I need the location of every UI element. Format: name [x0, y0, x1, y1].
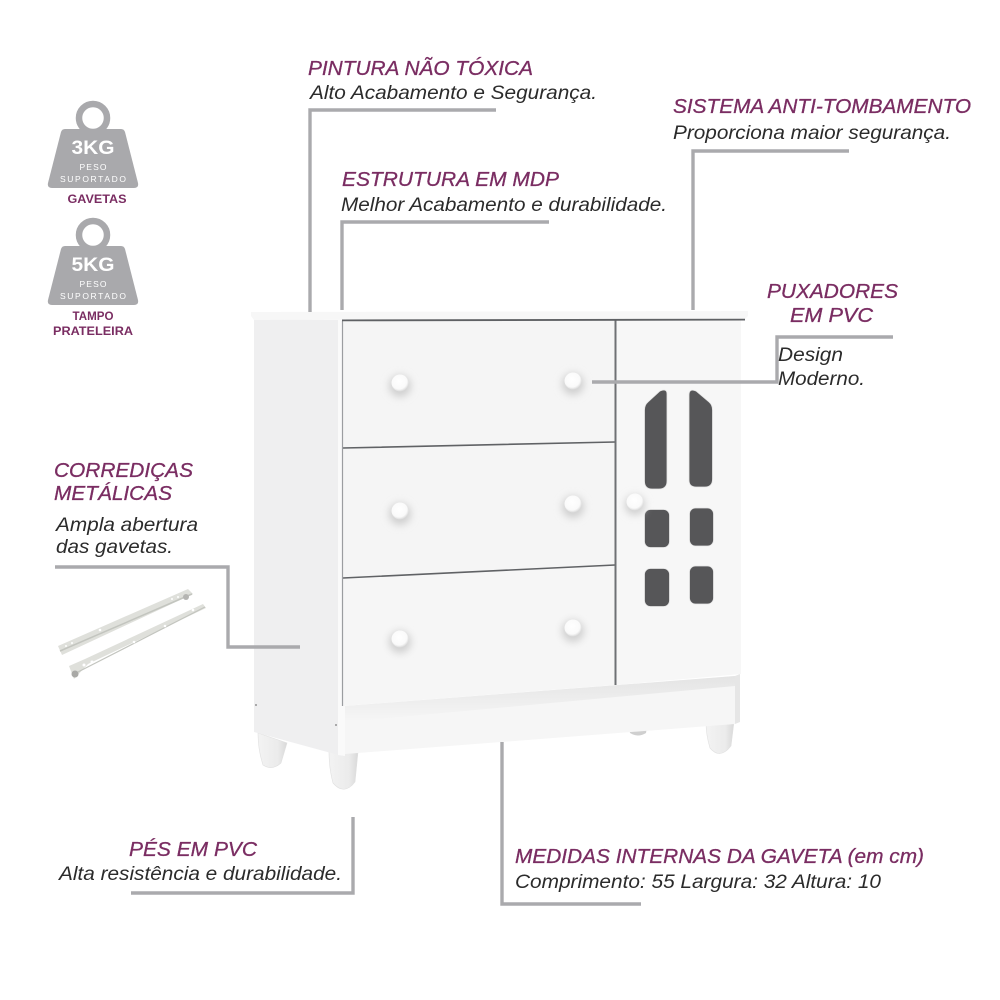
- callout: pintura não tóxica: Alto Acabamento e Segurança.: [309, 82, 597, 104]
- leg front left: [329, 752, 358, 789]
- callout: corrediças metálicas: [54, 459, 300, 647]
- callout: puxadores em PVC: [592, 280, 898, 390]
- icon: weight 5KG top and shelf: [48, 221, 138, 338]
- callout: corrediças metálicas: METÁLICAS: [54, 482, 172, 505]
- icon: weight 3KG drawers: SUPORTADO: [60, 174, 126, 184]
- icon: weight 5KG top and shelf: TAMPO: [72, 309, 114, 323]
- icon: weight 3KG drawers: PESO: [80, 162, 107, 172]
- door windows: [644, 390, 714, 606]
- plinth: [345, 676, 735, 754]
- callout: pés em PVC: PÉS EM PVC: [129, 838, 257, 861]
- furniture: white chest of drawers: [251, 311, 748, 789]
- callout: pés em PVC: Alta resistência e durabilidade.: [58, 863, 342, 885]
- icon: weight 5KG top and shelf: PESO: [80, 279, 107, 289]
- callout: estrutura em MDP: ESTRUTURA EM MDP: [342, 168, 559, 191]
- callout: pés em PVC: [58, 817, 353, 893]
- callout: medidas internas da gaveta: Comprimento: 55 Largura: 32 Altura: 10: [515, 871, 881, 893]
- callout: corrediças metálicas: CORREDIÇAS: [54, 459, 193, 482]
- icon: weight 5KG top and shelf: 5KG: [72, 255, 114, 276]
- leg right: [706, 722, 734, 754]
- icon: weight 5KG top and shelf: SUPORTADO: [60, 291, 126, 301]
- callout: estrutura em MDP: [341, 168, 667, 310]
- icon: weight 3KG drawers: 3KG: [72, 138, 114, 159]
- leg rear left: [258, 733, 287, 768]
- drawer 3: [343, 565, 615, 706]
- side panel: [254, 319, 342, 756]
- callout: sistema anti-tombamento: Proporciona maior segurança.: [673, 122, 951, 144]
- drawer 1: [343, 320, 615, 448]
- callout: sistema anti-tombamento: SISTEMA ANTI-TOMBAMENTO: [673, 95, 971, 118]
- callout: corrediças metálicas: Ampla abertura: [55, 514, 198, 536]
- door: [616, 320, 741, 685]
- drawer 2: [343, 442, 615, 578]
- icon: weight 3KG drawers: [48, 104, 138, 206]
- callout: puxadores em PVC: Design: [778, 344, 843, 366]
- icon: metal drawer slides: [58, 589, 206, 679]
- callout: puxadores em PVC: EM PVC: [790, 304, 873, 327]
- callout: corrediças metálicas: das gavetas.: [56, 536, 173, 558]
- callout: pintura não tóxica: [308, 56, 597, 312]
- callout: medidas internas da gaveta: MEDIDAS INTERNAS DA GAVETA (em cm): [515, 845, 924, 868]
- gaps between fronts: [342, 320, 616, 706]
- callout: puxadores em PVC: PUXADORES: [767, 280, 898, 303]
- callout: sistema anti-tombamento: [673, 95, 971, 310]
- callout: medidas internas da gaveta: [502, 742, 924, 904]
- knobs: [389, 372, 645, 653]
- icon: weight 3KG drawers: GAVETAS: [68, 192, 126, 206]
- callout: estrutura em MDP: Melhor Acabamento e durabilidade.: [341, 194, 667, 216]
- callout: puxadores em PVC: Moderno.: [778, 368, 865, 390]
- countertop: [251, 311, 748, 320]
- callout: pintura não tóxica: PINTURA NÃO TÓXICA: [308, 56, 533, 80]
- icon: weight 5KG top and shelf: PRATELEIRA: [53, 324, 133, 338]
- far foot: [629, 727, 647, 736]
